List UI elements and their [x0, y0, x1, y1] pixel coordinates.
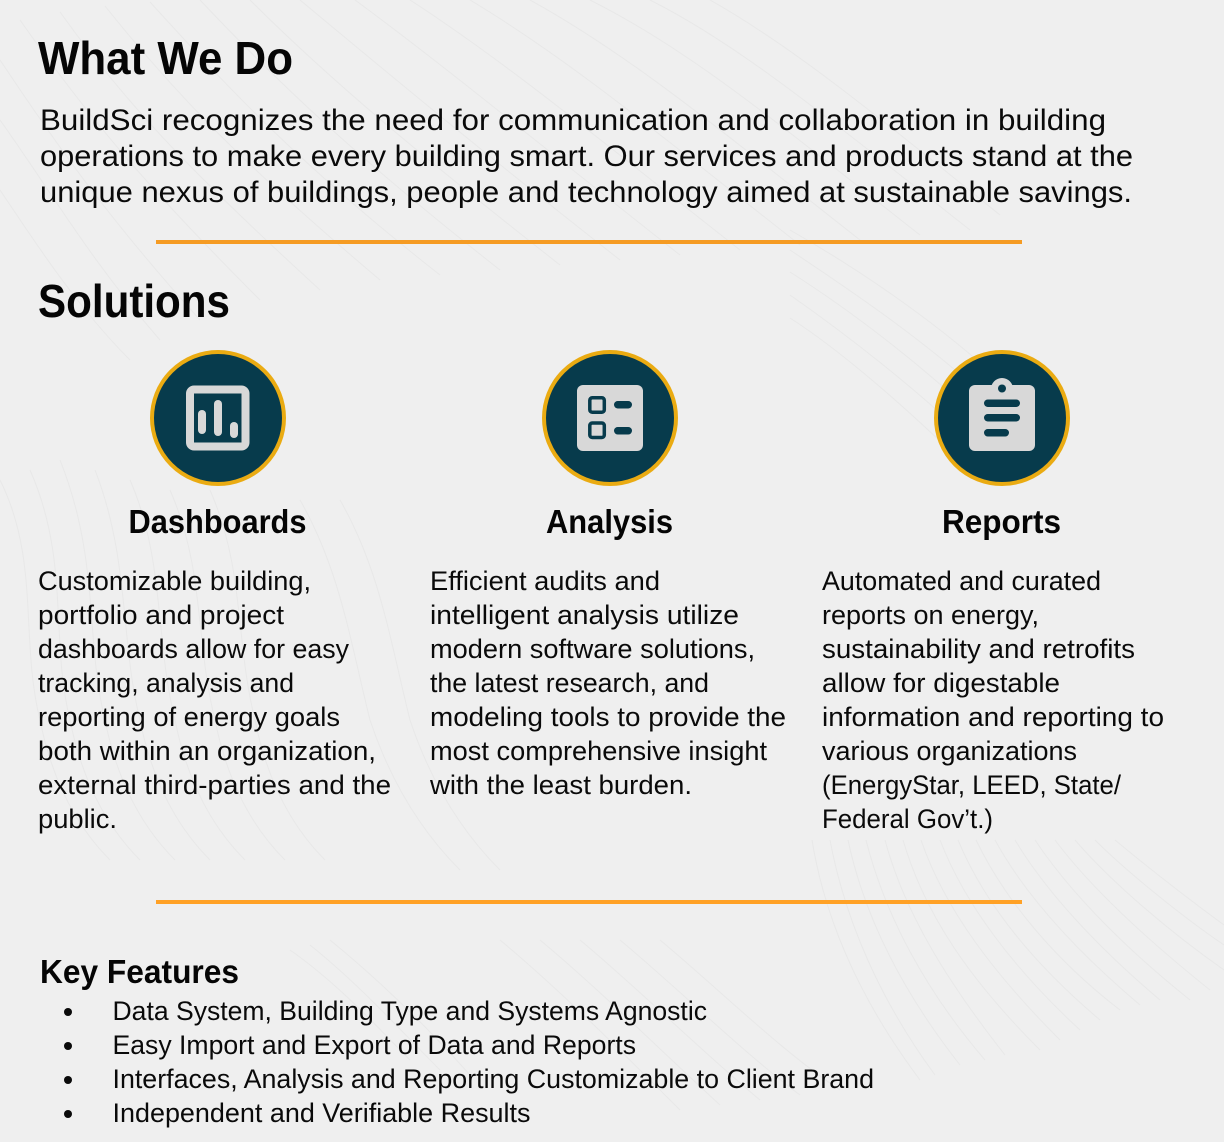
text: Dashboards description: both within an organization,	[38, 736, 376, 766]
text: Analysis description: modern software solutions,	[430, 634, 755, 664]
panel: Analysis	[429, 352, 786, 800]
text: Analysis description: intelligent analysis utilize	[430, 600, 739, 630]
text: Analysis description: most comprehensive insight	[430, 736, 767, 766]
heading: What We Do: What We Do	[38, 32, 293, 84]
intro paragraph: operations to make every building smart. Our services and products stand at the	[40, 140, 1133, 173]
heading: Reports: Reports	[942, 503, 1061, 540]
icon: dashboard chart	[152, 352, 284, 484]
text: Dashboards description: reporting of energy goals	[38, 702, 340, 732]
panel: Dashboards	[38, 352, 391, 834]
text: Reports description: various organizations	[822, 736, 1077, 766]
text: Analysis description: Efficient audits and	[430, 566, 660, 596]
text: Dashboards description: portfolio and project	[38, 600, 285, 630]
icon: checklist	[544, 352, 676, 484]
heading: Dashboards: Dashboards	[128, 503, 306, 540]
text: Reports description: allow for digestable	[822, 668, 1060, 698]
text: Reports description: sustainability and retrofits	[822, 634, 1135, 664]
list: key features: Easy Import and Export of Data and Reports	[112, 1030, 636, 1060]
text: Reports description: (EnergyStar, LEED, State/	[822, 770, 1121, 800]
panel: Reports	[822, 352, 1164, 834]
list: key features	[64, 996, 874, 1128]
text: Dashboards description: Customizable building,	[38, 566, 311, 596]
text: Reports description: Federal Gov’t.)	[822, 804, 993, 834]
text: Reports description: information and reporting to	[822, 702, 1164, 732]
text: Dashboards description: external third-parties and the	[38, 770, 391, 800]
heading: Solutions: Solutions	[38, 275, 230, 327]
text: Analysis description: with the least burden.	[429, 770, 692, 800]
intro paragraph	[40, 104, 1133, 209]
list: key features: Independent and Verifiable Results	[112, 1098, 530, 1128]
text: Dashboards description: tracking, analysis and	[38, 668, 294, 698]
intro paragraph: unique nexus of buildings, people and technology aimed at sustainable savings.	[40, 176, 1132, 209]
text: Dashboards description	[38, 566, 391, 834]
heading: Key Features: Key Features	[40, 953, 239, 990]
list: key features: Interfaces, Analysis and Reporting Customizable to Client Brand	[112, 1064, 874, 1094]
heading: Analysis: Analysis	[546, 503, 673, 540]
text: Analysis description	[429, 566, 786, 800]
text: Analysis description: the latest research, and	[430, 668, 709, 698]
list: key features: Data System, Building Type and Systems Agnostic	[112, 996, 707, 1026]
text: Dashboards description: public.	[38, 804, 117, 834]
text: Dashboards description: dashboards allow for easy	[38, 634, 349, 664]
text: Reports description: reports on energy,	[822, 600, 1039, 630]
text: Analysis description: modeling tools to provide the	[430, 702, 786, 732]
intro paragraph: BuildSci recognizes the need for communication and collaboration in building	[40, 104, 1106, 137]
text: Reports description	[822, 566, 1164, 834]
icon: clipboard	[936, 352, 1068, 484]
text: Reports description: Automated and curated	[822, 566, 1101, 596]
